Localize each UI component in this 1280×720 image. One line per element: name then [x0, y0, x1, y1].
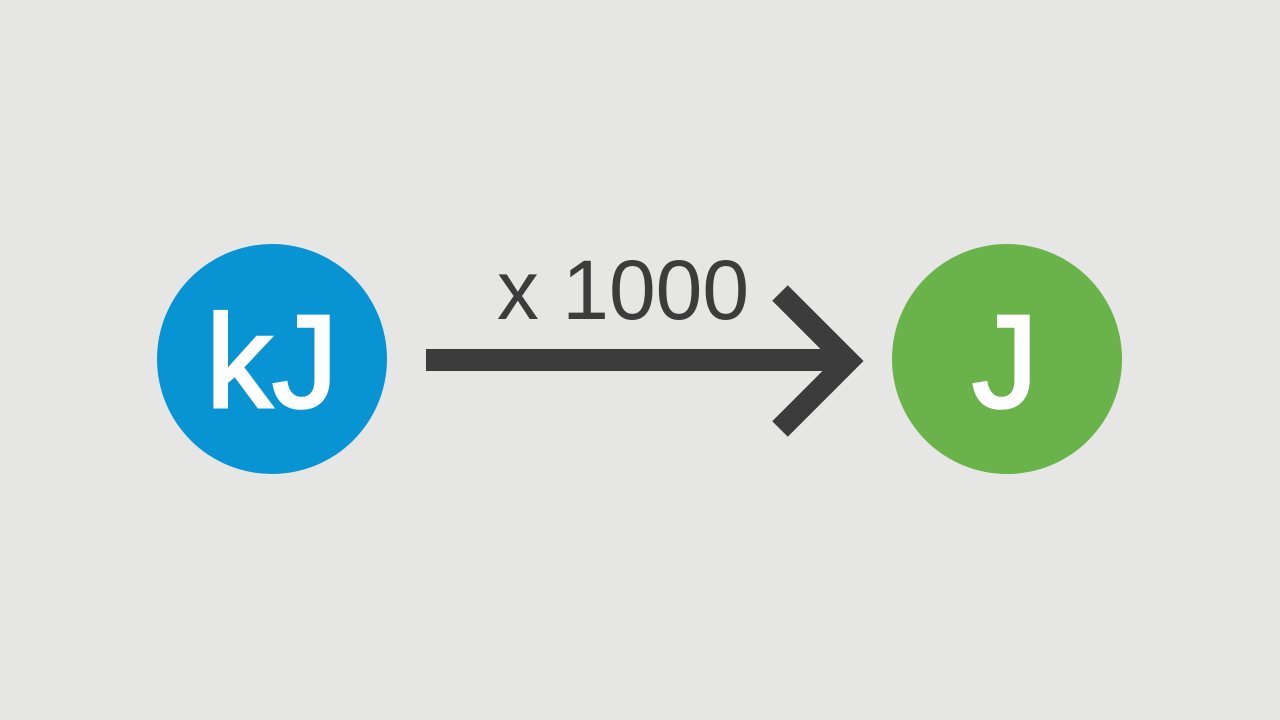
circle: J: [892, 244, 1122, 474]
arrow: conversion: [426, 293, 848, 429]
circle: kJ: [157, 244, 387, 474]
circle: J: J: [972, 288, 1038, 435]
circle: kJ: kJ: [206, 288, 338, 435]
label: x 1000: x 1000: [497, 243, 749, 337]
